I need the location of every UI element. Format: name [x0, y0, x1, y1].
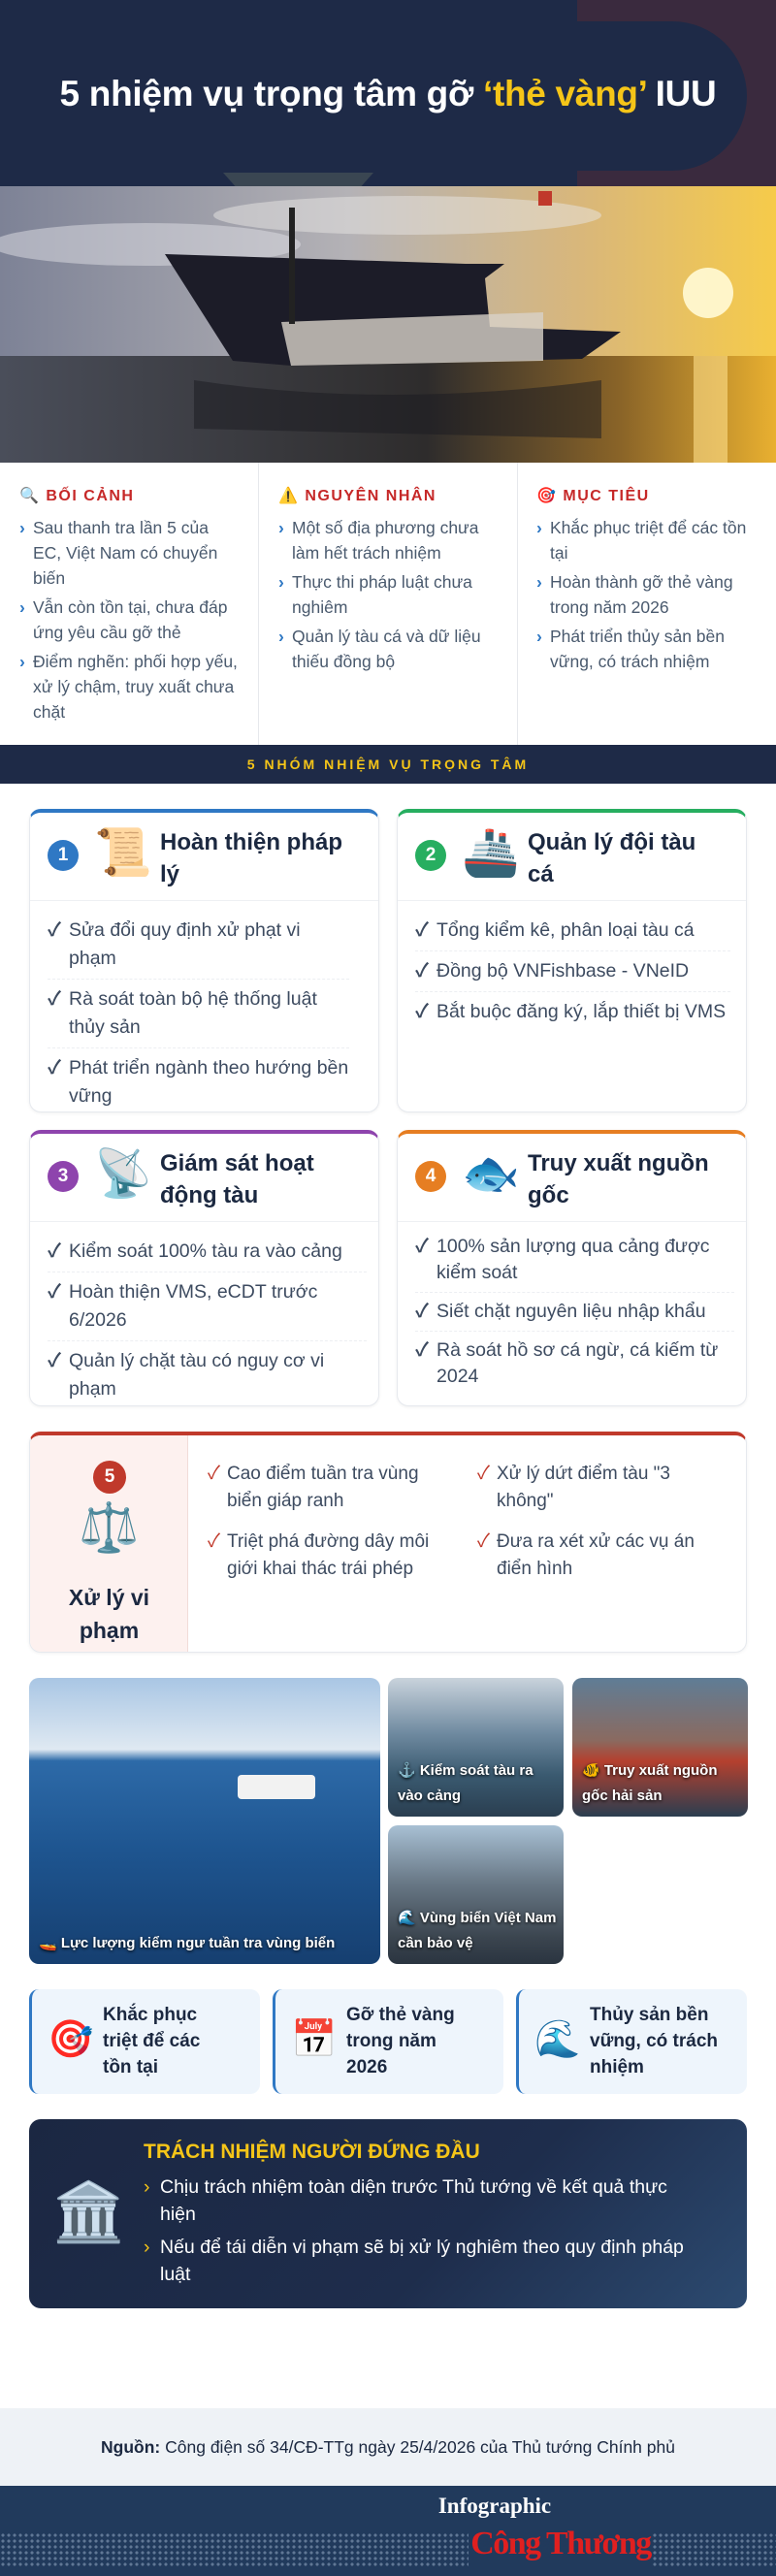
- goal 1: 🎯: [48, 2019, 93, 2060]
- card 1: 1: [58, 845, 68, 865]
- items: Triệt phá đường dây môi giới khai thác trái phép: [227, 1531, 429, 1579]
- goal 2: 📅: [291, 2019, 337, 2060]
- card 2: Đồng bộ VNFishbase - VNeID: [436, 960, 689, 982]
- card 4: 100% sản lượng qua cảng được kiểm soát: [436, 1236, 710, 1283]
- card 1: Rà soát toàn bộ hệ thống luật thủy sản: [69, 988, 317, 1038]
- goal 3: vững, có trách: [590, 2031, 718, 2051]
- goal 2: trong năm: [346, 2031, 436, 2051]
- items: ✓: [477, 1464, 490, 1484]
- footer: Công Thương: [470, 2526, 651, 2561]
- panel: mục tiêu: Hoàn thành gỡ thẻ vàng trong năm 2026: [550, 572, 733, 617]
- goal 2: [273, 1989, 503, 2094]
- goal 3: [516, 1989, 747, 2094]
- goal 3: Thủy sản bền: [590, 2005, 708, 2025]
- hero photo: fishing boat at sunrise: [0, 186, 776, 463]
- card 3: [29, 1130, 379, 1406]
- leader responsibility box: Nếu để tái diễn vi phạm sẽ bị xử lý nghiêm theo quy định pháp luật: [160, 2237, 684, 2285]
- section heading band: 5 NHÓM NHIỆM VỤ TRỌNG TÂM: [247, 757, 529, 772]
- photo: traceability: [572, 1678, 748, 1817]
- photo: port control: [388, 1678, 564, 1817]
- header band: [0, 0, 776, 186]
- panel: nguyên nhân: Thực thi pháp luật chưa nghiêm: [292, 572, 472, 617]
- panel: mục tiêu: 🎯 MỤC TIÊU: [536, 488, 650, 504]
- left panel: phạm: [80, 1618, 139, 1643]
- goal 3: nhiệm: [590, 2057, 644, 2077]
- items: ✓: [208, 1464, 220, 1484]
- card 2: 🚢: [462, 827, 520, 879]
- card 4: [397, 1130, 747, 1406]
- card 2: Bắt buộc đăng ký, lắp thiết bị VMS: [436, 1001, 726, 1022]
- photo: port control: ⚓ Kiểm soát tàu ra vào cảng: [398, 1762, 534, 1804]
- goal 3: 🌊: [534, 2019, 580, 2060]
- card 1: Hoàn thiện pháp lý: [160, 829, 342, 887]
- goal 2: Gỡ thẻ vàng: [346, 2005, 455, 2025]
- left panel: 5: [105, 1466, 114, 1487]
- card 1: [29, 809, 379, 1112]
- logo: Infographic: [438, 2494, 551, 2518]
- card 2: [397, 809, 747, 1112]
- panel: bối cảnh: [19, 487, 238, 722]
- card 3: Quản lý chặt tàu có nguy cơ vi phạm: [69, 1350, 324, 1400]
- left panel: ⚖️: [79, 1500, 140, 1555]
- card 5: [29, 1432, 747, 1653]
- left panel: [30, 1435, 188, 1653]
- card 2: 2: [426, 845, 436, 865]
- photo: sea: [388, 1825, 564, 1964]
- panel: bối cảnh: Vẫn còn tồn tại, chưa đáp ứng yêu cầu gỡ thẻ: [33, 597, 227, 642]
- context section: [0, 463, 776, 745]
- leader responsibility box: [29, 2119, 747, 2308]
- items: [208, 1464, 695, 1579]
- goal 1: triệt để các: [103, 2031, 200, 2051]
- card 3: 📡: [94, 1148, 152, 1200]
- title: 5 nhiệm vụ trọng tâm gỡ ‘thẻ vàng’ IUU: [60, 74, 716, 113]
- items: Xử lý dứt điểm tàu "3 không": [497, 1464, 670, 1511]
- left panel: Xử lý vi: [69, 1585, 149, 1610]
- card 3: Hoàn thiện VMS, eCDT trước 6/2026: [69, 1281, 317, 1331]
- panel: nguyên nhân: [278, 487, 481, 671]
- card 1: Phát triển ngành theo hướng bền vững: [69, 1057, 348, 1107]
- icon: building: 🏛️: [52, 2179, 125, 2244]
- photo: traceability: 🐠 Truy xuất nguồn gốc hải sản: [582, 1762, 718, 1804]
- panel: bối cảnh: Điểm nghẽn: phối hợp yếu, xử lý chậm, truy xuất chưa chặt: [33, 652, 238, 722]
- items: ✓: [477, 1531, 490, 1552]
- card 1: Sửa đổi quy định xử phạt vi phạm: [69, 919, 301, 969]
- panel: mục tiêu: [536, 487, 746, 671]
- section heading band: [0, 745, 776, 784]
- card 3: Kiểm soát 100% tàu ra vào cảng: [69, 1240, 342, 1262]
- photo: sea: 🌊 Vùng biển Việt Nam cần bảo vệ: [398, 1910, 556, 1951]
- goal 1: [29, 1989, 260, 2094]
- source: [0, 2408, 776, 2486]
- decorative shape: [577, 0, 776, 186]
- photo: patrol: 🚤 Lực lượng kiểm ngư tuần tra vùng biển: [39, 1935, 335, 1951]
- goal 1: Khắc phục: [103, 2005, 197, 2025]
- card 4: 4: [426, 1166, 436, 1186]
- panel: mục tiêu: Khắc phục triệt để các tồn tại: [550, 518, 746, 563]
- card 3: 3: [58, 1166, 68, 1186]
- card 4: Siết chặt nguyên liệu nhập khẩu: [436, 1301, 706, 1322]
- card 4: Rà soát hồ sơ cá ngừ, cá kiếm từ 2024: [436, 1339, 718, 1387]
- panel: nguyên nhân: Một số địa phương chưa làm hết trách nhiệm: [292, 518, 479, 563]
- footer: [0, 2486, 776, 2576]
- items: Đưa ra xét xử các vụ án điển hình: [497, 1531, 695, 1579]
- card 4: 🐟: [462, 1148, 520, 1200]
- leader responsibility box: Chịu trách nhiệm toàn diện trước Thủ tướng về kết quả thực hiện: [160, 2176, 667, 2225]
- card 2: Quản lý đội tàu cá: [528, 829, 695, 887]
- panel: nguyên nhân: Quản lý tàu cá và dữ liệu thiếu đồng bộ: [292, 627, 481, 671]
- goal 1: tồn tại: [103, 2057, 158, 2077]
- card 4: Truy xuất nguồn gốc: [528, 1150, 709, 1208]
- leader responsibility box: ›: [144, 2176, 149, 2198]
- goal 2: 2026: [346, 2057, 387, 2077]
- items: ✓: [208, 1531, 220, 1552]
- source: Nguồn: Công điện số 34/CĐ-TTg ngày 25/4/2026 của Thủ tướng Chính phủ: [101, 2437, 675, 2457]
- card 1: 📜: [94, 827, 152, 879]
- leader responsibility box: ›: [144, 2237, 149, 2258]
- leader responsibility box: TRÁCH NHIỆM NGƯỜI ĐỨNG ĐẦU: [144, 2141, 480, 2163]
- items: Cao điểm tuần tra vùng biển giáp ranh: [227, 1464, 419, 1511]
- panel: bối cảnh: 🔍 BỐI CẢNH: [19, 488, 134, 504]
- card 2: Tổng kiểm kê, phân loại tàu cá: [436, 919, 695, 941]
- card 3: Giám sát hoạt động tàu: [160, 1150, 314, 1208]
- panel: mục tiêu: Phát triển thủy sản bền vững, có trách nhiệm: [550, 627, 725, 671]
- panel: nguyên nhân: ⚠️ NGUYÊN NHÂN: [278, 488, 436, 504]
- photo: patrol: [29, 1678, 380, 1964]
- panel: bối cảnh: Sau thanh tra lần 5 của EC, Việt Nam có chuyển biến: [33, 518, 217, 588]
